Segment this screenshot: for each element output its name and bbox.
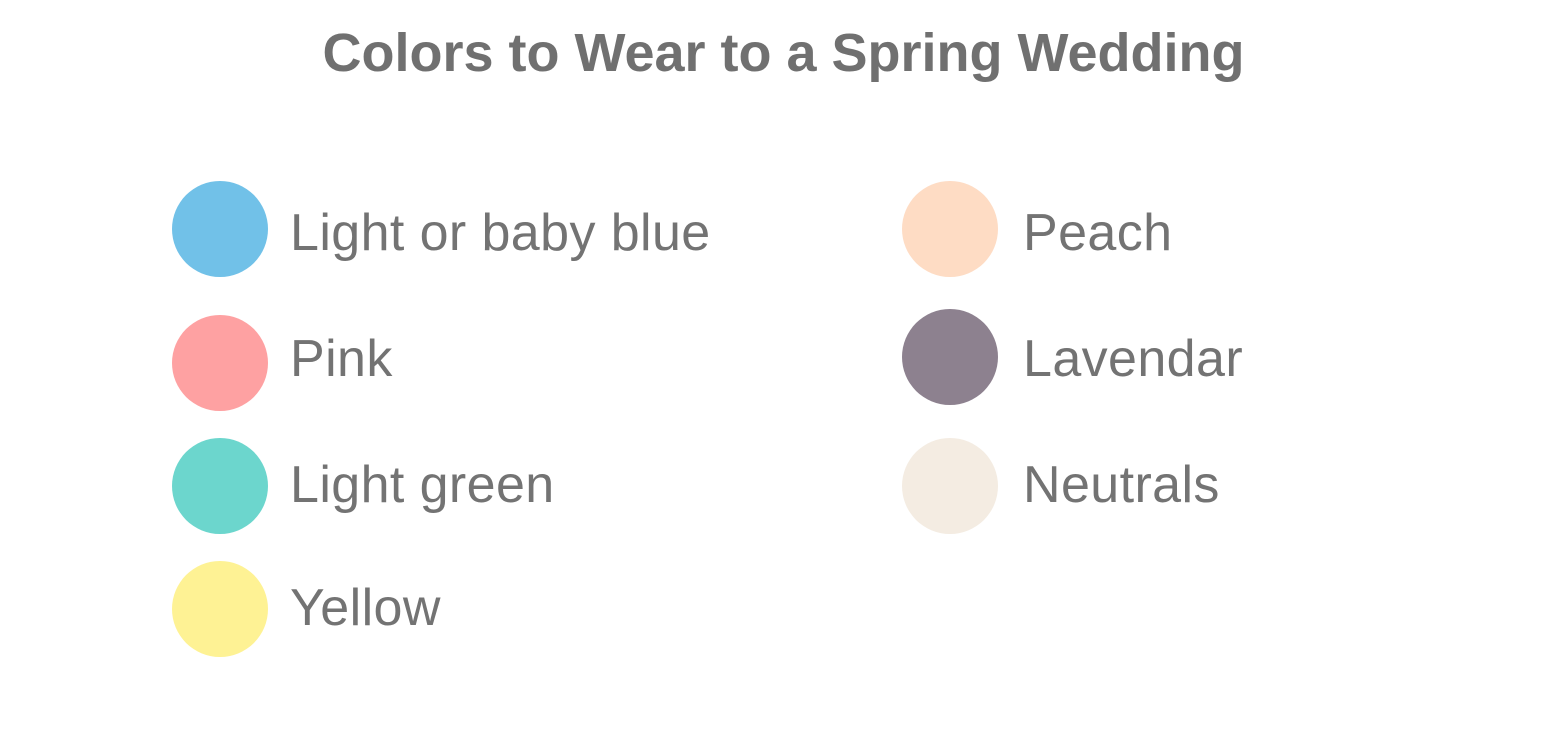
item: light green [172,438,555,534]
item: neutrals [902,438,1220,534]
item: neutrals: Neutrals [1023,456,1220,514]
item: light green: Light green [290,456,555,514]
title: Colors to Wear to a Spring Wedding [322,23,1245,83]
item: light blue: Light or baby blue [290,204,711,262]
item: yellow [172,561,441,657]
item: peach [902,181,1172,277]
item: pink [172,315,393,411]
item: peach: Peach [1023,204,1172,262]
item: lavender: Lavendar [1023,330,1243,388]
item: lavender [902,309,1243,405]
item: pink: Pink [290,330,393,388]
item: yellow: Yellow [290,579,441,637]
item: light blue [172,181,711,277]
